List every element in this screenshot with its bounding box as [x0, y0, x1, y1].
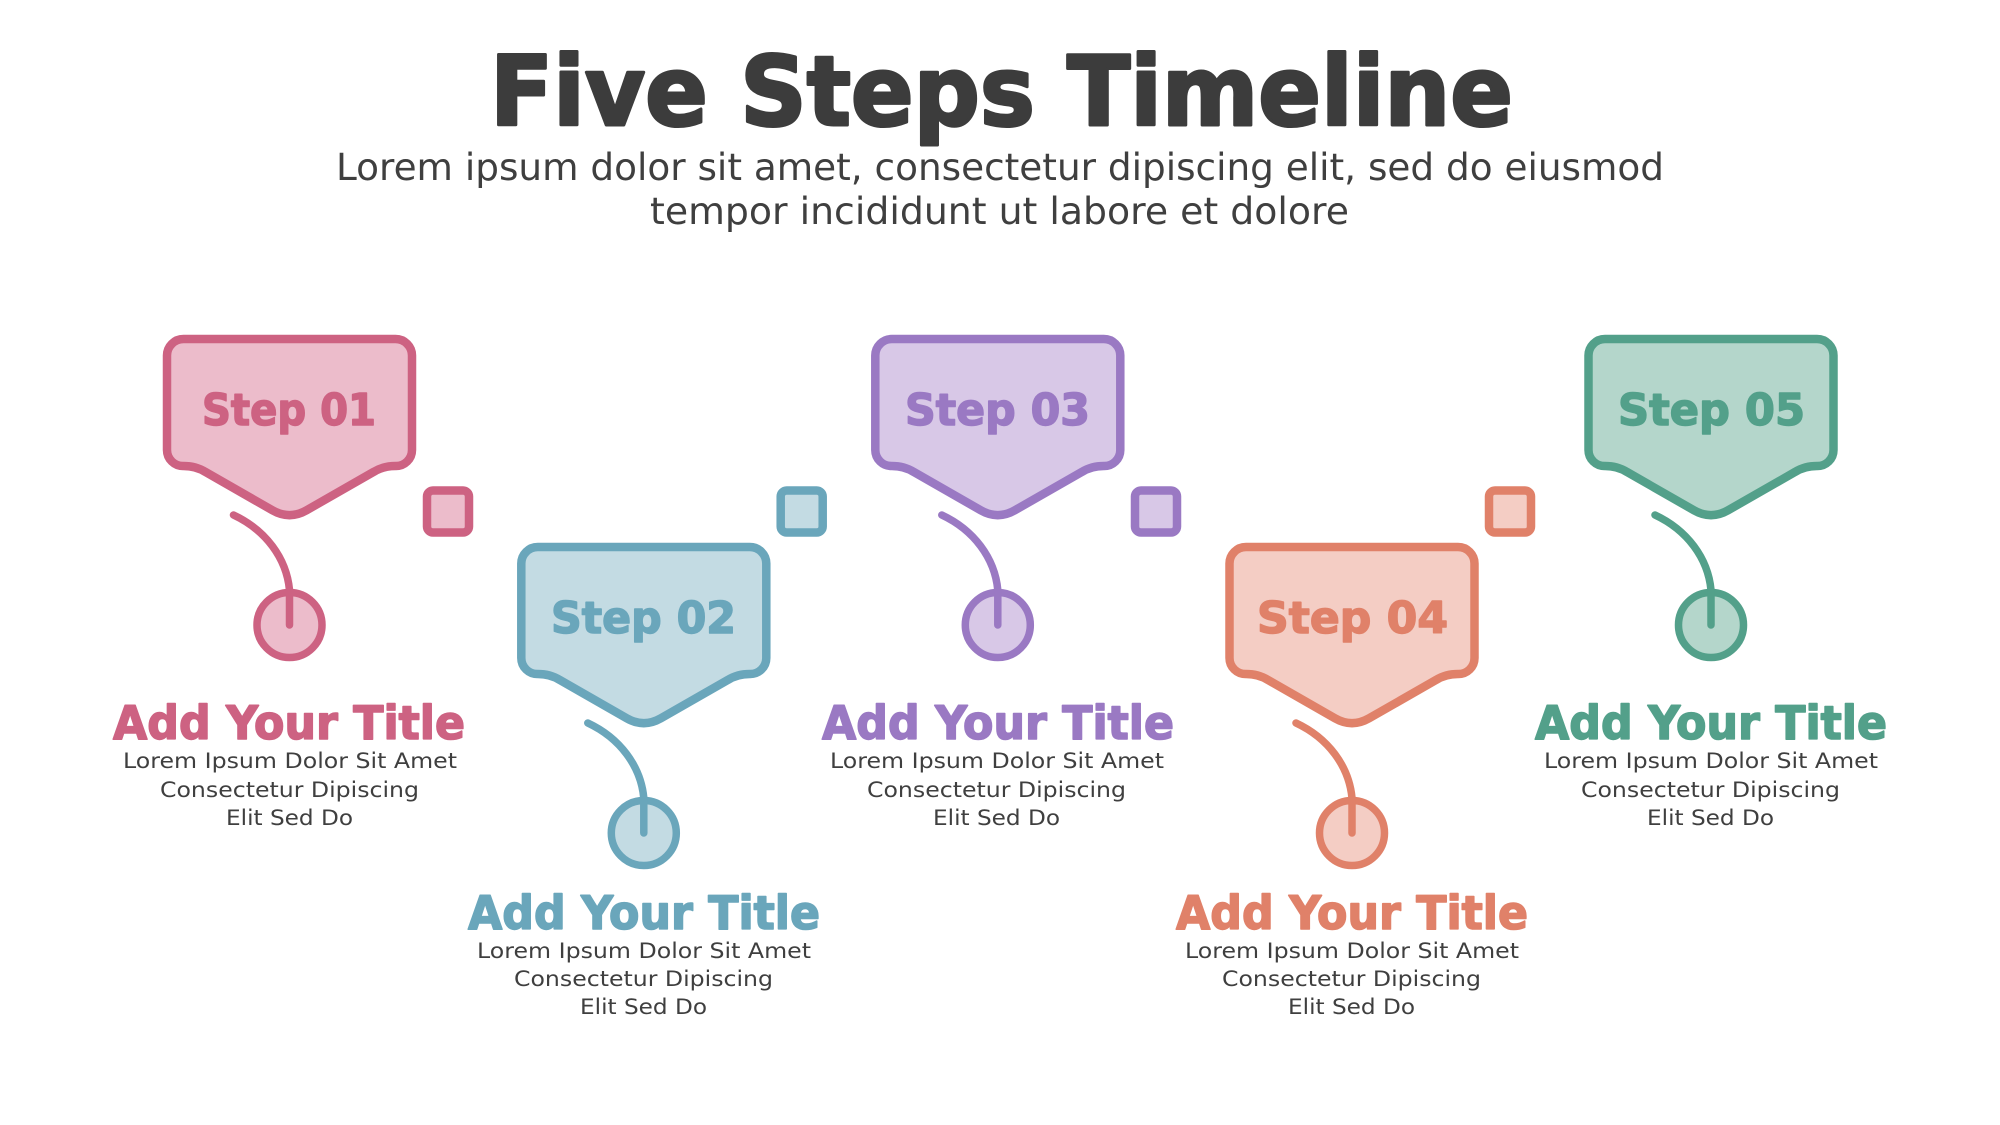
subtitle: Lorem ipsum dolor sit amet, consectetur dipiscing elit, sed do eiusmod — [336, 146, 1664, 189]
step 3 square marker — [1135, 490, 1177, 532]
step 5 banner — [1588, 339, 1834, 515]
step 5 body — [1544, 749, 1878, 831]
step 3 heading: Add Your Title — [822, 696, 1174, 750]
step 3 label: Step 03 — [905, 385, 1090, 436]
step 2 label: Step 02 — [551, 593, 736, 644]
step 1 label: Step 01 — [202, 385, 376, 436]
step 5 heading: Add Your Title — [1535, 696, 1887, 750]
step 5 panel — [1535, 339, 1887, 831]
step 4 body: Lorem Ipsum Dolor Sit Amet — [1185, 939, 1519, 964]
step 1 body: Consectetur Dipiscing — [160, 778, 419, 803]
step 4 panel — [1176, 490, 1531, 1020]
title: Five Steps Timeline — [490, 36, 1513, 148]
step 3 dot — [965, 592, 1030, 658]
step 4 dot — [1320, 800, 1384, 866]
step 2 body: Consectetur Dipiscing — [514, 967, 773, 992]
step 4 body: Elit Sed Do — [1288, 995, 1415, 1020]
step 2 body: Elit Sed Do — [580, 995, 707, 1020]
step 2 panel — [468, 490, 823, 1020]
step 3 body — [830, 749, 1164, 831]
step 3 connector — [942, 515, 998, 625]
step 1 body — [123, 749, 457, 831]
step 3 body: Consectetur Dipiscing — [867, 778, 1126, 803]
step 3 panel — [822, 339, 1177, 831]
step 3 body: Lorem Ipsum Dolor Sit Amet — [830, 749, 1164, 774]
step 1 panel — [113, 339, 469, 831]
step 5 dot — [1678, 592, 1744, 658]
step 4 body — [1185, 939, 1519, 1020]
step 1 body: Lorem Ipsum Dolor Sit Amet — [123, 749, 457, 774]
subtitle — [336, 146, 1664, 233]
step 4 banner — [1230, 547, 1474, 723]
step 2 body — [477, 939, 811, 1020]
step 2 body: Lorem Ipsum Dolor Sit Amet — [477, 939, 811, 964]
step 5 body: Lorem Ipsum Dolor Sit Amet — [1544, 749, 1878, 774]
step 2 square marker — [781, 490, 823, 532]
step 3 banner — [875, 339, 1120, 515]
step 2 connector — [588, 723, 644, 833]
subtitle: tempor incididunt ut labore et dolore — [650, 190, 1349, 233]
step 2 heading: Add Your Title — [468, 886, 820, 940]
step 2 banner — [521, 547, 766, 723]
step 4 label: Step 04 — [1257, 593, 1448, 644]
step 1 square marker — [427, 490, 469, 532]
step 4 connector — [1296, 723, 1352, 833]
step 4 body: Consectetur Dipiscing — [1222, 967, 1481, 992]
step 2 dot — [611, 800, 676, 866]
step 4 heading: Add Your Title — [1176, 886, 1528, 940]
step 4 square marker — [1489, 490, 1531, 532]
step 5 connector — [1655, 515, 1711, 625]
step 1 connector — [234, 515, 290, 625]
step 5 body: Elit Sed Do — [1647, 806, 1774, 831]
step 1 body: Elit Sed Do — [226, 806, 353, 831]
step 1 banner — [167, 339, 412, 515]
step 1 dot — [257, 592, 322, 658]
step 5 body: Consectetur Dipiscing — [1581, 778, 1840, 803]
step 1 heading: Add Your Title — [113, 696, 465, 750]
step 5 label: Step 05 — [1618, 385, 1805, 436]
step 3 body: Elit Sed Do — [933, 806, 1060, 831]
